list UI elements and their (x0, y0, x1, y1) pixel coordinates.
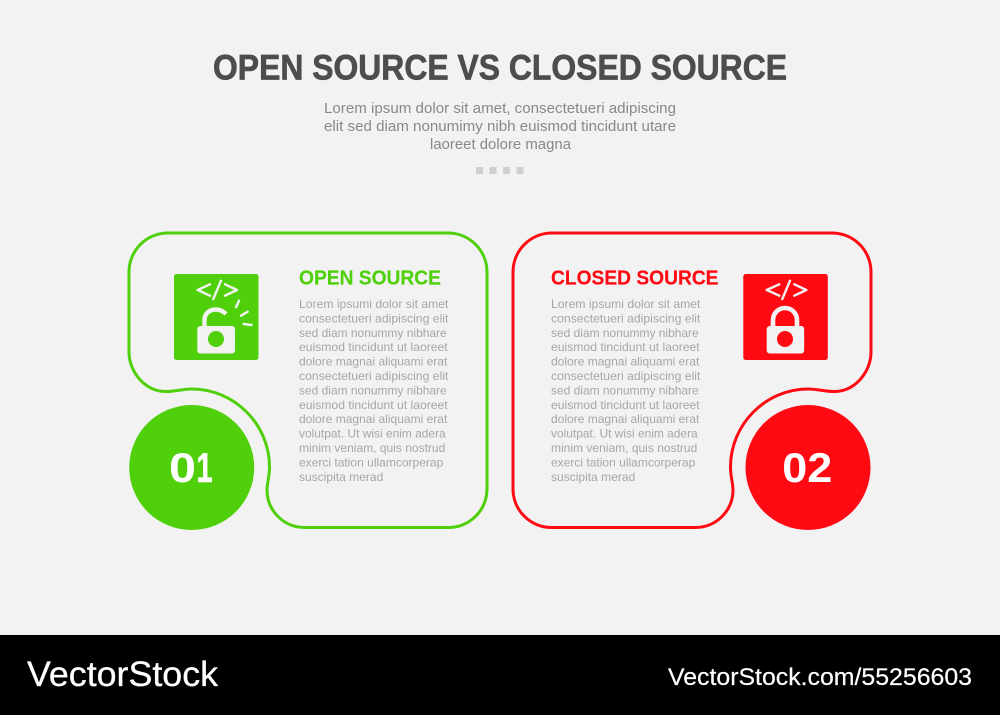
panel: closed source (513, 233, 871, 530)
number badge: 01 (129, 405, 254, 530)
panel: open source (129, 233, 487, 530)
body text: closed source: volutpat. Ut wisi enim adera (551, 427, 698, 441)
body text: closed source (551, 297, 701, 484)
heading: closed source: CLOSED SOURCE (551, 267, 718, 289)
body text: closed source: consectetueri adipiscing elit (551, 311, 701, 325)
number badge: 02 (746, 405, 870, 530)
body text: open source (299, 297, 449, 484)
body text: open source: sed diam nonummy nibhare (299, 326, 447, 340)
body text: open source: euismod tincidunt ut laoreet (299, 398, 448, 412)
body text: open source: dolore magnai aliquami erat (299, 355, 448, 369)
body text: closed source: dolore magnai aliquami erat (551, 355, 700, 369)
subtitle text block (324, 101, 676, 153)
footer image id: VectorStock.com/55256603 (668, 664, 972, 691)
body text: open source: consectetueri adipiscing elit (299, 369, 449, 383)
heading: open source: OPEN SOURCE (299, 267, 441, 289)
body text: closed source: euismod tincidunt ut laoreet (551, 398, 700, 412)
body text: open source: dolore magnai aliquami erat (299, 412, 448, 426)
heading dots (476, 167, 524, 174)
title: OPEN SOURCE VS CLOSED SOURCE (213, 48, 787, 88)
body text: closed source: suscipita merad (551, 470, 635, 484)
body text: closed source: minim veniam, quis nostrud (551, 441, 697, 455)
footer bar (0, 635, 1000, 715)
number badge: 01: 0 (169, 444, 196, 491)
subtitle text block: elit sed diam nonumimy nibh euismod tincidunt utare (324, 119, 676, 135)
body text: open source: Lorem ipsumi dolor sit amet (299, 297, 449, 311)
subtitle text block: laoreet dolore magna (430, 137, 572, 153)
body text: closed source: sed diam nonummy nibhare (551, 326, 699, 340)
footer logo text: VectorStock (27, 655, 219, 694)
body text: closed source: dolore magnai aliquami erat (551, 412, 700, 426)
number badge: 01: 1 (196, 444, 212, 491)
number badge: 02: 02 (782, 444, 832, 491)
body text: open source: minim veniam, quis nostrud (299, 441, 445, 455)
body text: open source: euismod tincidunt ut laoreet (299, 340, 448, 354)
body text: open source: sed diam nonummy nibhare (299, 383, 447, 397)
body text: closed source: sed diam nonummy nibhare (551, 383, 699, 397)
body text: closed source: exerci tation ullamcorperap (551, 455, 696, 469)
body text: closed source: consectetueri adipiscing elit (551, 369, 701, 383)
body text: open source: volutpat. Ut wisi enim adera (299, 427, 446, 441)
panel outline: open source (129, 233, 487, 528)
body text: open source: suscipita merad (299, 470, 383, 484)
icon: open padlock with code (174, 274, 258, 360)
body text: closed source: Lorem ipsumi dolor sit amet (551, 297, 701, 311)
subtitle text block: Lorem ipsum dolor sit amet, consectetueri adipiscing (324, 101, 676, 117)
body text: open source: consectetueri adipiscing elit (299, 311, 449, 325)
body text: open source: exerci tation ullamcorperap (299, 455, 444, 469)
icon: closed padlock with code (743, 274, 828, 360)
panel outline: closed source (513, 233, 871, 527)
body text: closed source: euismod tincidunt ut laoreet (551, 340, 700, 354)
